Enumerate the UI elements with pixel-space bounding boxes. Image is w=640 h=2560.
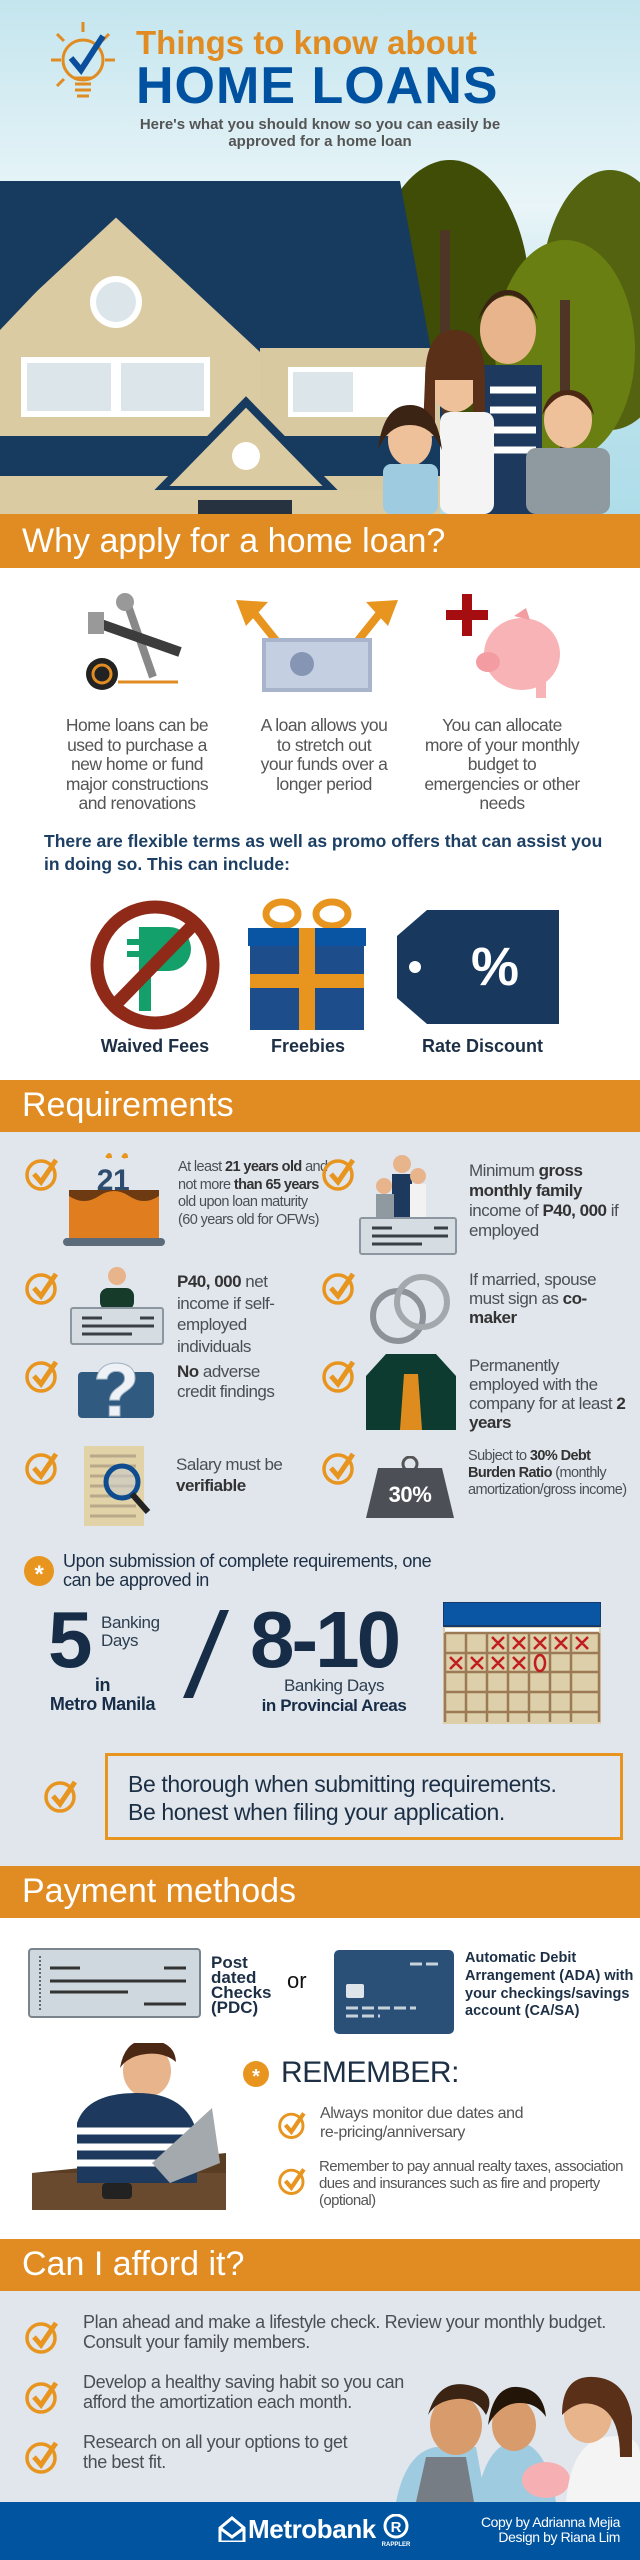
req 4: spouse co-maker: [322, 1270, 596, 1344]
stat: 5 banking days Metro Manila: in: [95, 1675, 110, 1695]
req 4: spouse co-maker: If married, spouse must sign as co-maker: [469, 1270, 596, 1327]
tip 2: Develop a healthy saving habit so you can afford the amortization each month.: [83, 2372, 404, 2412]
title: [136, 24, 498, 115]
tip 3: Research on all your options to get the best fit.: [83, 2432, 347, 2472]
callout: be thorough: [105, 1753, 623, 1840]
stat: 8-10 banking days provincial: Banking Days: [284, 1676, 384, 1695]
remember item 1: [278, 2105, 523, 2141]
credits: Copy by Adrianna Mejia: [481, 2514, 620, 2530]
stat: 5 banking days Metro Manila: [48, 1595, 160, 1714]
text: post dated checks: dated: [211, 1968, 256, 1987]
illustration: house, trees and family: [0, 160, 640, 514]
text: reason 1: Home loans can be used to purchase a new home or fund major constructions and renovations: [66, 715, 208, 813]
icon: calendar: [443, 1602, 601, 1724]
label: freebies: Freebies: [271, 1036, 345, 1056]
section heading: Requirements: [0, 1080, 640, 1132]
section heading: Can I afford it: [0, 2239, 640, 2291]
section heading: Why apply: Why apply for a home loan?: [22, 522, 445, 560]
text: flexible terms: There are flexible terms as well as promo offers that can assist you in doing so. This can include:: [44, 831, 602, 874]
text: reason 3: You can allocate more of your monthly budget to emergencies or other needs: [424, 715, 580, 813]
text: post dated checks: (PDC): [211, 1998, 258, 2017]
illustration: kids with piggy bank: [396, 2376, 640, 2502]
req 7: salary verifiable: [25, 1446, 282, 1526]
icon: rate discount tag: %: [471, 937, 519, 997]
header: sky background: [0, 0, 640, 514]
title: HOME LOANS: [136, 57, 498, 115]
logo: Rappler: R: [391, 2519, 402, 2536]
panel: why apply reasons: [0, 568, 640, 1080]
stat: 5 banking days Metro Manila: 5: [48, 1595, 92, 1684]
callout: be thorough: Be honest when filing your application.: [128, 1799, 505, 1825]
req 1: age: At least 21 years old and not more than 65 years old upon loan maturity (60 years old for OFWs): [178, 1159, 327, 1228]
remember item 1: re-pricing/anniversary: [320, 2124, 465, 2141]
req 3: self-employed income: P40, 000 net income if self-employed individuals: [177, 1272, 274, 1356]
icon: light bulb with check: [51, 22, 115, 98]
icon: debit card: [334, 1950, 454, 2034]
tip 1: Plan ahead and make a lifestyle check. Review your monthly budget. Consult your family members.: [83, 2312, 606, 2352]
logo: Rappler: [382, 2514, 411, 2548]
req 6: permanently employed: Permanently employed with the company for at least 2 years: [469, 1356, 625, 1432]
icon: red cross and piggy bank: [446, 594, 560, 698]
req 5: no adverse credit: [25, 1354, 274, 1433]
logo: Metrobank: Metrobank: [248, 2514, 376, 2544]
remember item 2: Remember to pay annual realty taxes, association dues and insurances such as fire and property (optional): [319, 2158, 623, 2209]
text: automatic debit arrangement: Automatic Debit Arrangement (ADA) with your checkings/savings account (CA/SA): [465, 1950, 633, 2019]
stat: 5 banking days Metro Manila: Days: [101, 1631, 138, 1650]
remember item 1: Always monitor due dates and: [320, 2105, 523, 2122]
illustration: man with laptop: [32, 2043, 226, 2210]
text: post dated checks: [211, 1953, 271, 2017]
divider slash: [183, 1610, 229, 1698]
stat: 8-10 banking days provincial: in Provincial Areas: [262, 1696, 406, 1715]
text: post dated checks: Post: [211, 1953, 248, 1972]
req 1: age: 21: [97, 1164, 129, 1197]
stat: 8-10 banking days provincial: 8-10: [250, 1595, 398, 1684]
footer: [0, 2502, 640, 2560]
label: rate discount: Rate Discount: [422, 1036, 543, 1056]
stat: 5 banking days Metro Manila: Banking: [101, 1613, 160, 1632]
req 6: permanently employed: [322, 1354, 626, 1432]
req 1: age: [25, 1153, 328, 1246]
icon: rate discount tag: [397, 910, 559, 1024]
section heading: Requirements: Requirements: [22, 1086, 234, 1124]
stat: 5 banking days Metro Manila: Metro Manila: [50, 1694, 155, 1714]
section heading: Why apply: [0, 514, 640, 568]
req 8: debt burden ratio: [322, 1448, 626, 1518]
req 7: salary verifiable: Salary must be verifiable: [176, 1455, 282, 1495]
credits: [481, 2514, 620, 2545]
callout: be thorough: Be thorough when submitting requirements.: [128, 1771, 557, 1797]
panel: payment methods: [0, 1918, 640, 2239]
label: waived fees: Waived Fees: [101, 1036, 209, 1056]
heading: remember: REMEMBER:: [281, 2056, 459, 2089]
text: reason 2: A loan allows you to stretch out your funds over a longer period: [261, 715, 387, 794]
note: approval time: Upon submission of complete requirements, one can be approved in: [63, 1551, 431, 1590]
section heading: Can I afford it: Can I afford it?: [22, 2245, 244, 2283]
req 8: debt burden ratio: Subject to 30% Debt Burden Ratio (monthly amortization/gross income): [468, 1448, 626, 1498]
text: post dated checks: Checks: [211, 1983, 271, 2002]
icon: gift: [248, 898, 366, 1030]
req 2: family income: [322, 1155, 619, 1255]
req 3: self-employed income: [25, 1267, 274, 1356]
panel: requirements: [0, 1132, 640, 1866]
section heading: Payment methods: [0, 1866, 640, 1918]
icon: money with arrows: [236, 600, 398, 692]
section heading: Payment methods: Payment methods: [22, 1872, 296, 1910]
req 2: family income: Minimum gross monthly family income of P40, 000 if employed: [469, 1161, 618, 1240]
credits: Design by Riana Lim: [498, 2529, 620, 2545]
text: or: or: [287, 1968, 307, 1993]
panel: affordability tips: [0, 2291, 640, 2502]
icon: tools: [86, 593, 182, 690]
req 5: no adverse credit: No adverse credit findings: [177, 1362, 274, 1401]
icon: check: [28, 1948, 201, 2018]
check icon: reminder: [44, 1780, 77, 1813]
logo: Rappler: RAPPLER: [382, 2542, 411, 2548]
subtitle: Here's what you should know so you can easily be approved for a home loan: [140, 116, 500, 150]
icon: waived fees: [90, 900, 220, 1030]
family: [480, 296, 536, 364]
req 8: debt burden ratio: 30%: [389, 1482, 431, 1507]
title: Things to know about: [136, 24, 477, 61]
